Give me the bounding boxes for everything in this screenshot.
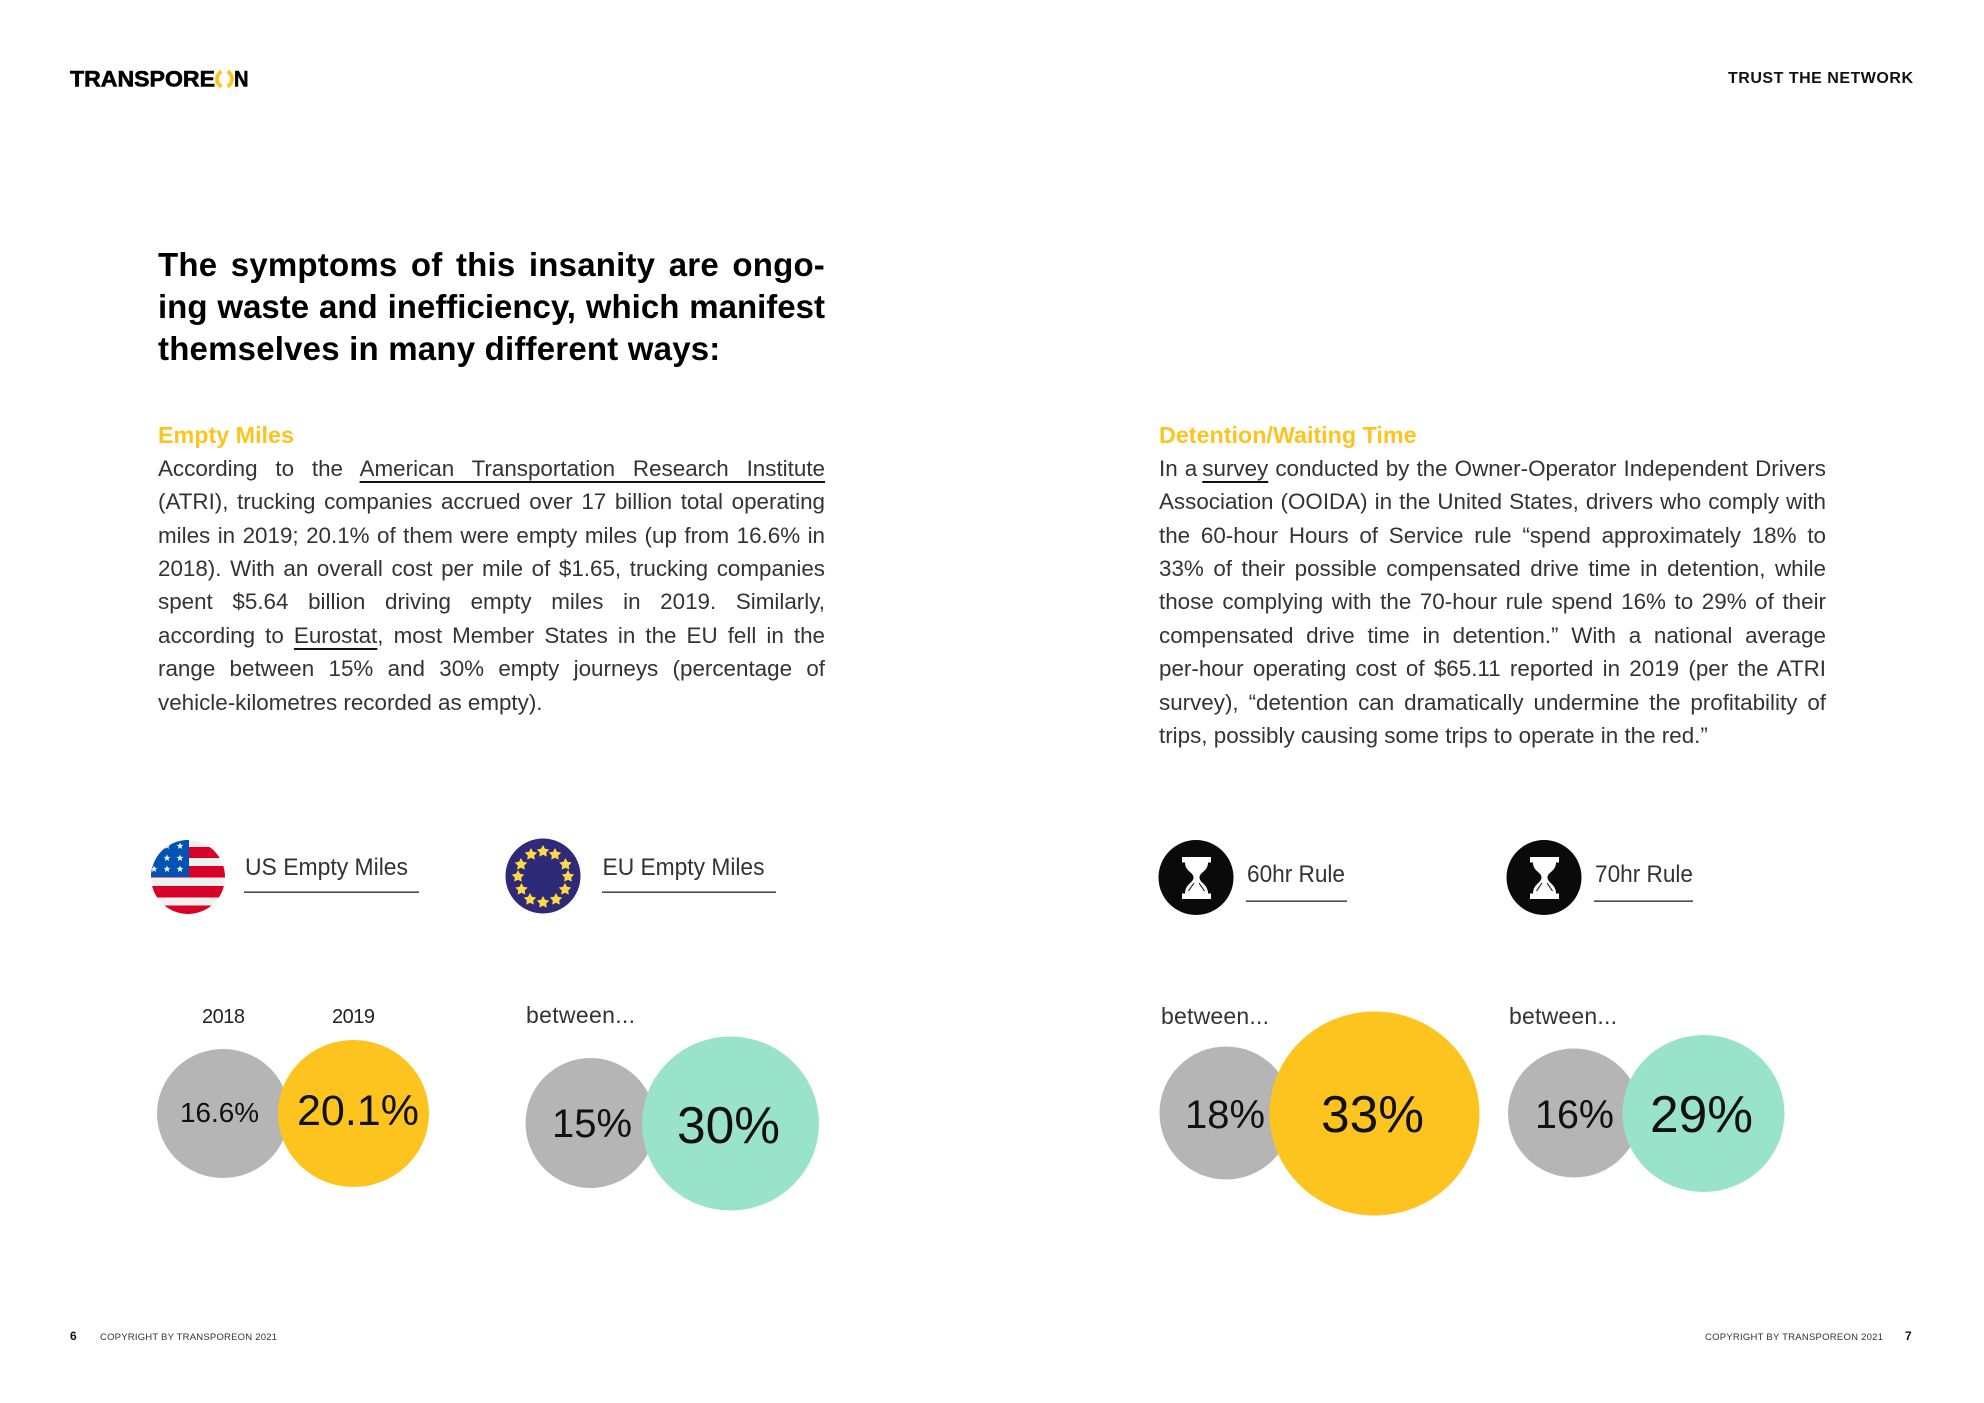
heading: The symptoms of this insanity are ongo- bbox=[158, 246, 825, 283]
text block: empty miles: range between 15% and 30% empty journeys (percentage of bbox=[158, 656, 825, 681]
text block: empty miles: Empty Miles bbox=[158, 422, 294, 448]
chart: US empty miles 2018 vs 2019: 20.1% bbox=[297, 1087, 419, 1135]
text block: detention bbox=[1159, 422, 1826, 748]
logo: TRANSPORE bbox=[70, 66, 215, 92]
footer left: 6 bbox=[70, 1329, 77, 1343]
label: EU Empty Miles: EU Empty Miles bbox=[602, 854, 764, 881]
text block: detention: Detention/Waiting Time bbox=[1159, 422, 1417, 448]
text block: detention: those complying with the 70-hour rule spend 16% to 29% of their bbox=[1159, 589, 1826, 614]
text block: empty miles: According to the American Transportation Research Institute bbox=[158, 456, 825, 480]
text block: empty miles bbox=[158, 422, 825, 714]
footer right: COPYRIGHT BY TRANSPOREON 2021 bbox=[1705, 1332, 1883, 1343]
header tagline: TRUST THE NETWORK bbox=[1728, 70, 1913, 87]
chart: 70hr rule range bbox=[1508, 1003, 1784, 1192]
text block: empty miles: (ATRI), trucking companies accrued over 17 billion total operating bbox=[158, 489, 825, 514]
chart: 60hr rule range: 33% bbox=[1321, 1086, 1424, 1144]
text block: empty miles: vehicle-kilometres recorded as empty). bbox=[158, 690, 543, 714]
footer left: COPYRIGHT BY TRANSPOREON 2021 bbox=[100, 1332, 277, 1343]
label: 60hr Rule: 60hr Rule bbox=[1247, 861, 1345, 888]
icon: US flag bbox=[150, 838, 226, 916]
chart: EU empty miles range bbox=[526, 1002, 819, 1210]
text block: empty miles: miles in 2019; 20.1% of them were empty miles (up from 16.6% in bbox=[158, 522, 825, 548]
chart: 60hr rule range: 18% bbox=[1185, 1093, 1265, 1137]
chart: 60hr rule range bbox=[1160, 1003, 1480, 1216]
chart: 60hr rule range: between... bbox=[1161, 1003, 1269, 1029]
icon: hourglass 70hr bbox=[1506, 840, 1582, 915]
text block: detention: trips, possibly causing some trips to operate in the red.” bbox=[1159, 723, 1708, 748]
text block: empty miles: according to Eurostat, most Member States in the EU fell in the bbox=[158, 623, 825, 648]
footer left bbox=[70, 1329, 277, 1343]
heading bbox=[158, 246, 825, 367]
label: 70hr Rule: 70hr Rule bbox=[1595, 861, 1693, 888]
icon: hourglass 60hr bbox=[1158, 840, 1234, 915]
chart: EU empty miles range: 15% bbox=[552, 1102, 632, 1146]
text block: detention: survey), “detention can dramatically undermine the profitability of bbox=[1159, 690, 1826, 714]
footer right: 7 bbox=[1905, 1329, 1912, 1343]
logo: N bbox=[234, 66, 248, 92]
text block: empty miles: 2018). With an overall cost per mile of $1.65, trucking companies bbox=[158, 556, 825, 581]
heading: themselves in many different ways: bbox=[158, 330, 720, 367]
text block: detention: 33% of their possible compensated drive time in detention, while bbox=[1159, 556, 1826, 581]
chart: US empty miles 2018 vs 2019: 2019 bbox=[332, 1006, 375, 1028]
chart: US empty miles 2018 vs 2019 bbox=[157, 1006, 429, 1187]
chart: US empty miles 2018 vs 2019: 2018 bbox=[202, 1006, 245, 1028]
footer right bbox=[1705, 1329, 1912, 1343]
text block: empty miles: spent $5.64 billion driving empty miles in 2019. Similarly, bbox=[158, 589, 825, 614]
chart: 70hr rule range: between... bbox=[1509, 1003, 1617, 1029]
icon: EU flag bbox=[506, 838, 580, 914]
text block: detention: the 60-hour Hours of Service rule “spend approximately 18% to bbox=[1159, 522, 1826, 548]
text block: detention: In a survey conducted by the Owner-Operator Independent Drivers bbox=[1159, 456, 1826, 480]
chart: US empty miles 2018 vs 2019: 16.6% bbox=[180, 1097, 259, 1128]
chart: EU empty miles range: between... bbox=[526, 1002, 635, 1028]
text block: detention: Association (OOIDA) in the United States, drivers who comply with bbox=[1159, 489, 1826, 514]
label: US Empty Miles: US Empty Miles bbox=[245, 854, 408, 881]
label: 60hr Rule bbox=[1246, 861, 1347, 902]
chart: EU empty miles range: 30% bbox=[677, 1097, 780, 1155]
label: 70hr Rule bbox=[1594, 861, 1693, 902]
chart: 70hr rule range: 29% bbox=[1650, 1086, 1753, 1144]
heading: ing waste and inefficiency, which manifest bbox=[158, 288, 825, 325]
chart: 70hr rule range: 16% bbox=[1535, 1093, 1614, 1137]
text block: detention: per-hour operating cost of $65.11 reported in 2019 (per the ATRI bbox=[1159, 656, 1826, 681]
text block: detention: compensated drive time in detention.” With a national average bbox=[1159, 623, 1826, 648]
